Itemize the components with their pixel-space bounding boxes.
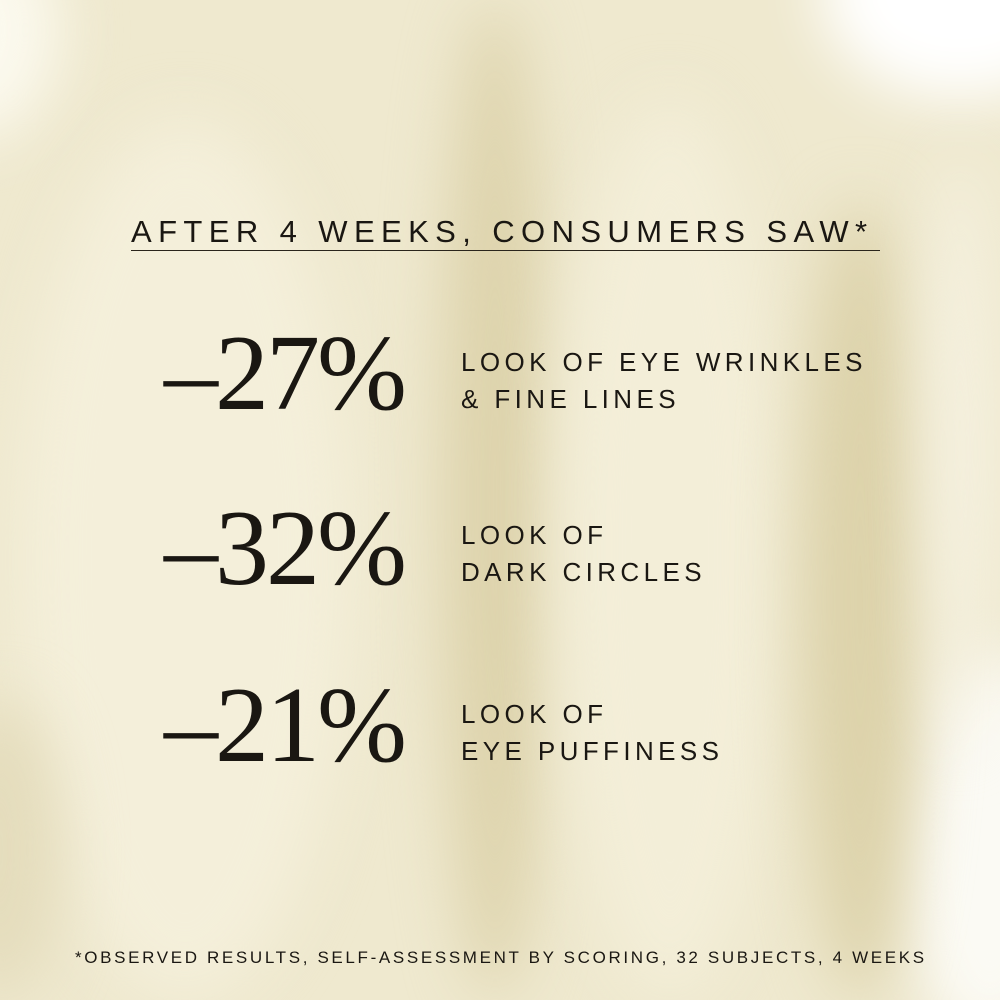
footnote: *OBSERVED RESULTS, SELF-ASSESSMENT BY SCORING, 32 SUBJECTS, 4 WEEKS <box>75 948 927 967</box>
stat 2 <box>163 489 706 608</box>
label: & FINE LINES <box>461 384 680 414</box>
label: EYE PUFFINESS <box>461 736 723 766</box>
label <box>461 520 706 587</box>
label: LOOK OF <box>461 699 607 729</box>
label: LOOK OF <box>461 520 607 550</box>
label: LOOK OF EYE WRINKLES <box>461 347 867 377</box>
stat 1 <box>163 314 867 433</box>
number: –27% <box>164 314 404 433</box>
label <box>461 347 867 414</box>
number: –32% <box>164 489 404 608</box>
label <box>461 699 723 766</box>
label: DARK CIRCLES <box>461 557 706 587</box>
title: AFTER 4 WEEKS, CONSUMERS SAW* <box>131 214 874 249</box>
number: –21% <box>164 666 404 785</box>
stat 3 <box>163 666 723 785</box>
